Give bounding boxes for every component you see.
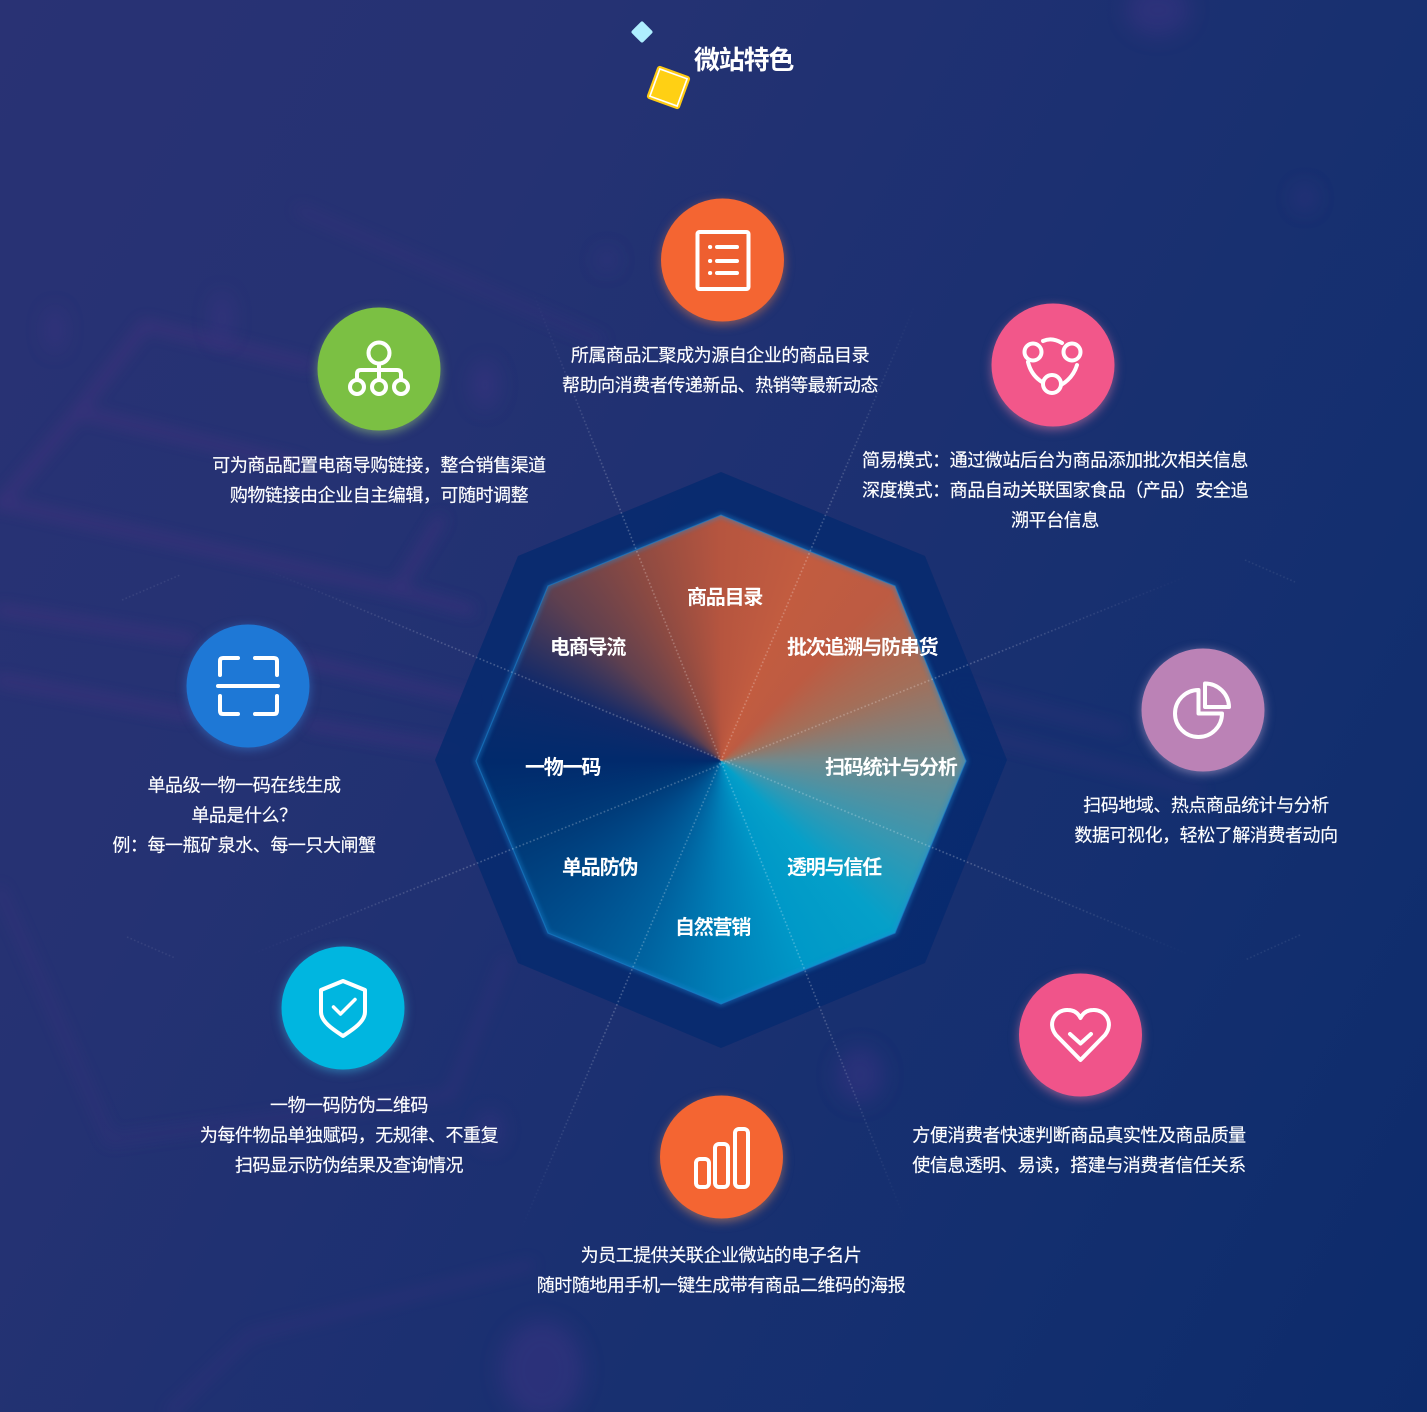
title: 微站特色 (694, 45, 794, 75)
text: 电商导流说明 (212, 456, 546, 506)
icon: blue diamond (631, 21, 653, 43)
text: 自然营销说明 (537, 1246, 906, 1296)
panel: 批次追溯 (862, 304, 1248, 530)
text: 一物一码说明: 例：每一瓶矿泉水、每一只大闸蟹 (112, 836, 376, 856)
octagon labels: 透明与信任 (787, 856, 882, 879)
octagon labels: 扫码统计与分析 (825, 755, 958, 779)
text: 单品防伪说明: 一物一码防伪二维码 (270, 1096, 428, 1116)
text: 批次追溯说明 (862, 450, 1248, 530)
text: 商品目录说明 (562, 346, 878, 396)
title block (631, 21, 794, 110)
octagon labels: 电商导流 (550, 636, 626, 659)
octagon labels: 单品防伪 (562, 856, 637, 879)
icon: heart check (1052, 1010, 1109, 1060)
text: 一物一码说明: 单品级一物一码在线生成 (147, 776, 341, 796)
panel: 单品防伪 (200, 946, 499, 1176)
octagon labels: 自然营销 (675, 915, 751, 939)
panel: 一物一码 (112, 624, 376, 856)
text: 扫码统计说明: 扫码地域、热点商品统计与分析 (1083, 796, 1329, 816)
text: 单品防伪说明 (200, 1096, 499, 1176)
text: 商品目录说明: 所属商品汇聚成为源自企业的商品目录 (571, 346, 870, 366)
icon: share nodes (1024, 339, 1080, 393)
text: 商品目录说明: 帮助向消费者传递新品、热销等最新动态 (562, 376, 878, 396)
inner octagon gradient fan (481, 515, 966, 1004)
octagon labels: 批次追溯与防串货 (787, 635, 939, 659)
text: 透明与信任说明 (912, 1126, 1246, 1176)
text: 电商导流说明: 购物链接由企业自主编辑，可随时调整 (230, 486, 529, 506)
icon: pie chart (1175, 684, 1229, 737)
text: 自然营销说明: 随时随地用手机一键生成带有商品二维码的海报 (537, 1276, 906, 1296)
panel: 自然营销 (537, 1096, 906, 1296)
text: 批次追溯说明: 深度模式：商品自动关联国家食品（产品）安全追 (862, 480, 1248, 500)
text: 扫码统计说明: 数据可视化，轻松了解消费者动向 (1074, 826, 1338, 846)
icon: bar chart (696, 1129, 748, 1187)
text: 一物一码说明: 单品是什么？ (191, 806, 297, 826)
text: 批次追溯说明: 溯平台信息 (1011, 510, 1099, 530)
octagon labels: 商品目录 (687, 586, 763, 609)
panel: 电商导流 (212, 308, 546, 506)
octagon labels (525, 586, 958, 939)
text: 透明与信任说明: 方便消费者快速判断商品真实性及商品质量 (912, 1126, 1246, 1146)
panel: 透明与信任 (912, 974, 1246, 1176)
text: 电商导流说明: 可为商品配置电商导购链接，整合销售渠道 (212, 456, 546, 476)
icon: scan frame (218, 658, 278, 714)
octagon labels: 一物一码 (525, 756, 600, 779)
text: 透明与信任说明: 使信息透明、易读，搭建与消费者信任关系 (912, 1156, 1246, 1176)
text: 单品防伪说明: 为每件物品单独赋码，无规律、不重复 (200, 1126, 499, 1146)
panel: 商品目录 (562, 198, 878, 396)
icon: shield check (321, 981, 365, 1036)
text: 单品防伪说明: 扫码显示防伪结果及查询情况 (235, 1156, 464, 1176)
text: 扫码统计说明 (1074, 796, 1338, 846)
text: 批次追溯说明: 简易模式：通过微站后台为商品添加批次相关信息 (862, 450, 1248, 470)
icon: org tree (350, 342, 408, 394)
panel: 扫码统计 (1074, 648, 1338, 846)
text: 一物一码说明 (112, 776, 376, 856)
icon: yellow square (646, 65, 691, 110)
text: 自然营销说明: 为员工提供关联企业微站的电子名片 (581, 1246, 861, 1266)
icon: document list (698, 232, 748, 289)
